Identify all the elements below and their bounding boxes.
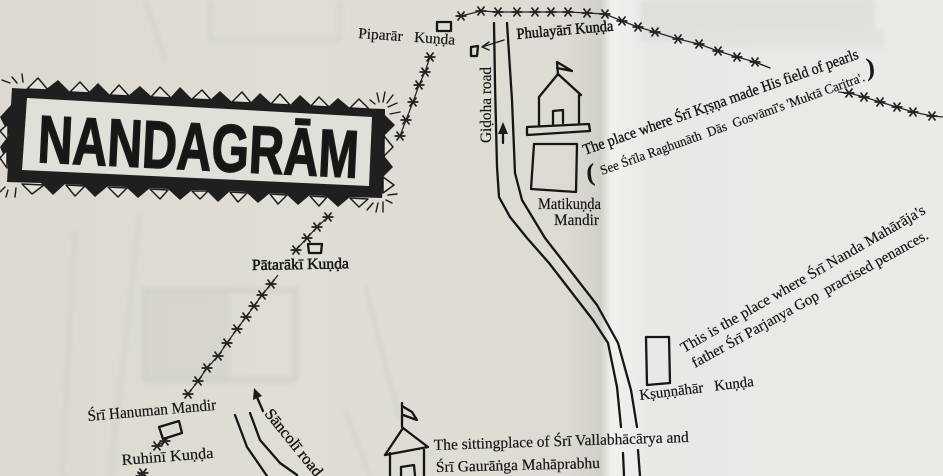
label: Piparār Kuṇḍa: Piparār Kuṇḍa	[358, 26, 456, 49]
label: Pātarākī Kuṇḍa: Pātarākī Kuṇḍa	[252, 255, 349, 274]
label: Matikuṇḍa Mandir: Mandir	[554, 212, 600, 229]
callout: Vallabhācārya sitting place	[434, 429, 689, 476]
icon: Kṣuṇṇāhār Kuṇḍa tank	[646, 337, 670, 385]
barbed boundary: along the top	[461, 11, 755, 62]
barbed boundary: by Pātarākī Kuṇḍa	[296, 217, 328, 250]
arrow: Gidoha road direction	[498, 122, 508, 143]
title banner: NANDAGRĀM	[0, 74, 400, 212]
barbed boundary: Ruhinī Kuṇḍa	[157, 441, 165, 446]
banner title text: NANDAGRĀM	[36, 102, 361, 193]
label: Śrī Hanuman Mandir: Śrī Hanuman Mandir	[87, 395, 217, 425]
icon: Matikuṇḍa temple	[527, 62, 590, 192]
Gidoha road	[494, 23, 640, 476]
icon: Phulayārī Kuṇḍa tank	[471, 46, 478, 56]
callout: Parjanya Gop penances: father Śrī Parjanya Gop practised penances.	[689, 227, 931, 371]
barbed boundary: tail end	[755, 62, 770, 68]
callout: Vallabhācārya sitting place: The sittingplace of Śrī Vallabhācārya and	[434, 429, 689, 454]
icon: Piparār Kuṇḍa tank	[437, 22, 451, 31]
banner inner panel	[22, 98, 372, 186]
label: Gidoha road: Giḍoha road	[478, 67, 495, 143]
banner frame with zigzag edge	[0, 80, 395, 207]
label: Matikuṇḍa Mandir: Matikuṇḍa	[538, 196, 601, 213]
arrow: Sāncolī road direction	[253, 388, 263, 411]
callout: Vallabhācārya sitting place: Śrī Gaurāṅga Mahāprabhu	[436, 455, 600, 476]
callout: field of pearls: )	[865, 54, 876, 82]
banner zigzag triangles	[0, 78, 394, 207]
icon: Pātarākī Kuṇḍa tank	[308, 244, 322, 253]
barbed boundary: Pātarākī to Hanuman Mandir	[187, 275, 278, 395]
icon: Vallabhācārya sitting-place temple	[385, 403, 428, 476]
barbed boundary: top and upper left	[400, 57, 430, 136]
callout: field of pearls: See Śrīla Raghunāth Dās Gosvāmī's 'Muktā Caritra'.	[598, 69, 867, 178]
callout: Parjanya Gop penances: This is the place where Śrī Nanda Mahārāja's	[678, 202, 929, 356]
banner corner sparks	[0, 74, 400, 212]
label: Ruhinī Kuṇḍa: Ruhinī Kuṇḍa	[121, 445, 214, 469]
barbed boundary: right	[838, 92, 943, 117]
arrow: to Phulayārī Kuṇḍa	[482, 40, 504, 50]
Sāncolī road	[235, 413, 297, 476]
icon: Hanuman Mandir	[159, 421, 182, 439]
callout: field of pearls: (	[585, 159, 596, 187]
barbed boundary: bottom stub	[141, 473, 143, 476]
label: Kṣuṇṇāhār Kuṇḍa: Kṣuṇṇāhār Kuṇḍa	[639, 374, 755, 404]
label: Matikuṇḍa Mandir	[538, 196, 601, 229]
label: Phulayārī Kuṇḍa: Phulayārī Kuṇḍa	[516, 18, 614, 43]
callout: field of pearls: The place where Śrī Kṛṣṇa made His field of pearls	[581, 46, 861, 159]
